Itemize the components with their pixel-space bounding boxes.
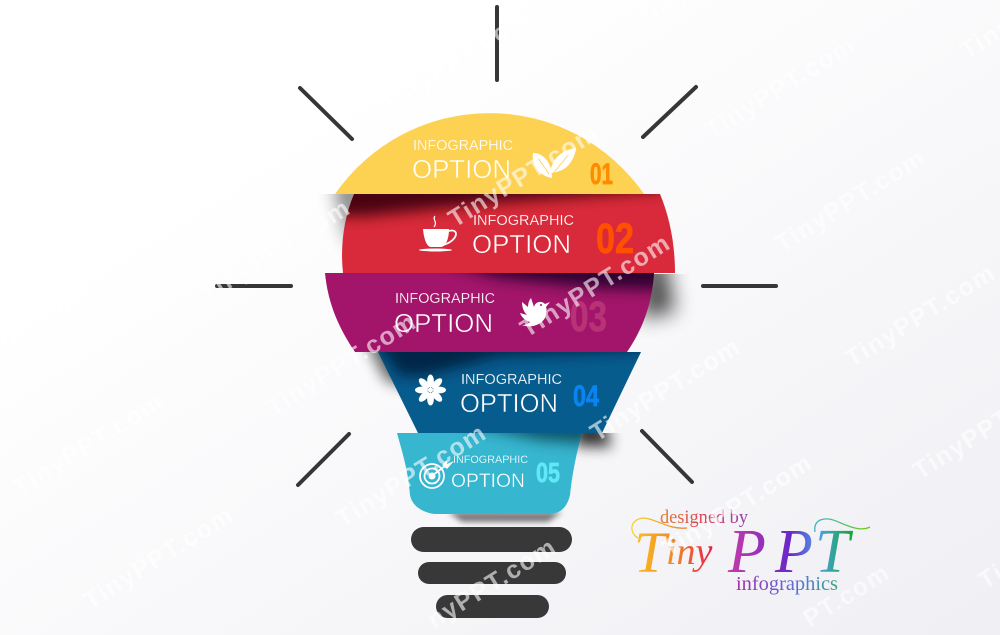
label 1	[412, 138, 513, 184]
watermarks: TinyPPT.com	[657, 448, 818, 563]
icon: coffee cup	[419, 216, 456, 252]
label 3: OPTION	[394, 308, 493, 338]
watermarks: TinyPPT.com	[375, 3, 536, 118]
bulb segment 2: red	[342, 194, 675, 273]
watermarks: TinyPPT.com	[700, 30, 861, 145]
watermarks: TinyPPT.com	[8, 387, 169, 502]
icon: flower	[415, 374, 446, 406]
label 4: OPTION	[460, 388, 558, 418]
number 02: 02	[596, 215, 634, 263]
logo: designed by Tiny PPT infographics: P	[774, 518, 813, 586]
number 05: 05	[536, 457, 560, 488]
logo: designed by Tiny PPT infographics: T	[815, 518, 854, 586]
label 1: OPTION	[412, 154, 511, 184]
bulb segment 5: teal	[397, 433, 582, 514]
label 3	[394, 291, 495, 338]
watermarks: PT.com	[798, 558, 895, 633]
label 2: INFOGRAPHIC	[473, 213, 574, 229]
bulb segment 4: blue	[378, 352, 641, 433]
label 4	[460, 372, 562, 418]
logo: designed by Tiny PPT infographics	[632, 508, 870, 595]
watermarks: TinyPPT.com	[515, 228, 676, 343]
watermarks: TinyPPT.com	[195, 193, 356, 308]
watermarks: TinyPPT.com	[261, 307, 422, 422]
label 5	[451, 454, 528, 492]
inner shadow	[446, 273, 654, 300]
number 01: 01	[590, 158, 613, 191]
logo: designed by Tiny PPT infographics: designed by	[660, 508, 749, 528]
watermarks: TinyPPT.com	[840, 258, 1000, 373]
label 5: OPTION	[451, 470, 525, 492]
label 5: INFOGRAPHIC	[453, 454, 528, 466]
watermarks: TinyPPT.com	[770, 143, 931, 258]
number 03: 03	[570, 293, 607, 341]
icon: leaves	[533, 148, 576, 178]
logo: designed by Tiny PPT infographics: T	[634, 520, 670, 585]
label 4: INFOGRAPHIC	[461, 372, 562, 388]
icon: bird	[520, 298, 550, 326]
label 3: INFOGRAPHIC	[395, 291, 495, 307]
watermarks: TinyPPT.com	[331, 418, 492, 533]
icon: target	[420, 460, 454, 488]
watermarks: TinyPPT.com	[78, 500, 239, 615]
inner shadow	[345, 194, 662, 226]
inner shadow	[378, 352, 641, 384]
label 2: OPTION	[472, 229, 571, 259]
bulb segment 3: purple	[325, 273, 654, 352]
logo: designed by Tiny PPT infographics: infographics	[736, 573, 838, 595]
inner shadow	[468, 433, 582, 453]
watermarks: TinyPPT.com	[585, 332, 746, 447]
light rays	[217, 7, 776, 485]
watermarks: TinyPPT.com	[443, 118, 604, 233]
watermarks: nyPPT.com	[422, 533, 562, 634]
watermarks: TinyPPT.com	[123, 83, 284, 198]
outer drop shadows	[335, 180, 675, 522]
number 04: 04	[573, 380, 599, 413]
logo: designed by Tiny PPT infographics: iny	[666, 531, 713, 573]
bulb base	[411, 527, 572, 618]
logo: designed by Tiny PPT infographics: P	[727, 518, 766, 586]
bulb segment 1: yellow	[335, 113, 644, 194]
label 2	[472, 213, 574, 259]
label 1: INFOGRAPHIC	[413, 138, 513, 154]
